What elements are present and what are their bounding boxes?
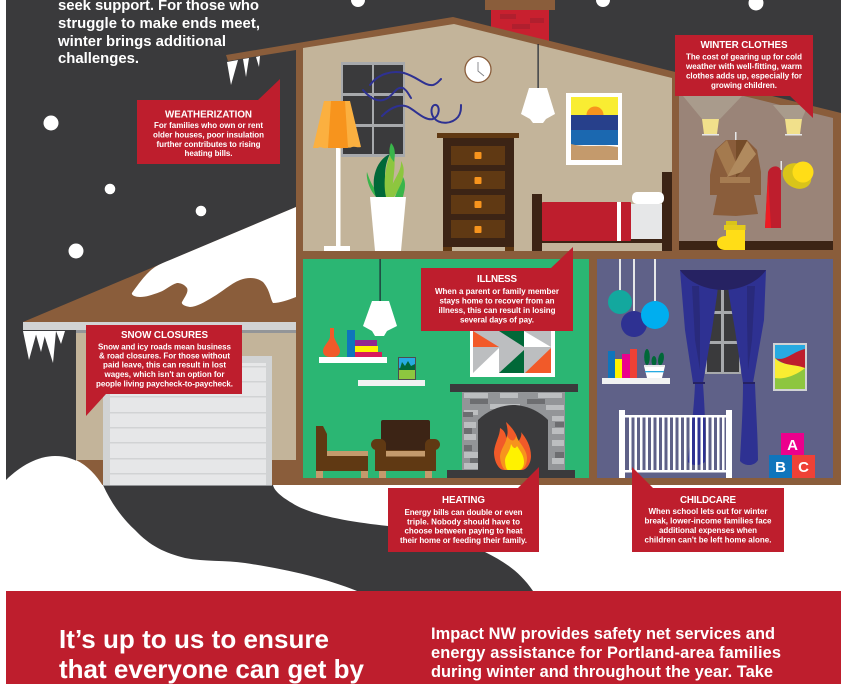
pendant lamp: [363, 259, 397, 336]
intro text: [57, 0, 260, 67]
callout: weatherization: older houses, poor insulation: [153, 130, 264, 140]
garage roof: [23, 207, 296, 322]
body text: [431, 625, 781, 681]
callout: illness: When a parent or family member: [435, 287, 559, 296]
callout: illness: stays home to recover from an: [440, 296, 555, 306]
side chair: [316, 426, 368, 478]
callout: snow closures: wages, which isn't an option for: [104, 370, 224, 379]
pendant lamp: [521, 44, 555, 123]
callout: snow closures: [86, 325, 242, 416]
callout: illness: illness, this can result in losing: [438, 306, 556, 315]
armchair: [371, 420, 440, 478]
callout: weatherization: heating bills.: [184, 149, 232, 158]
callout: snow closures: paid leave, this can result in lost: [103, 360, 226, 370]
room: living room: [303, 259, 589, 478]
geometric art: [470, 331, 555, 377]
colourful picture: [773, 343, 807, 391]
soffit: [23, 322, 296, 330]
heading: [59, 624, 365, 684]
callout: illness: [421, 247, 573, 331]
room: nursery: [597, 259, 833, 478]
callout: heating: HEATING: [442, 495, 485, 506]
callout: winter clothes: clothes adds up, especially for: [686, 72, 802, 80]
icicles: [23, 331, 65, 363]
shelf with books and plant: [602, 349, 670, 384]
callout: illness: several days of pay.: [460, 316, 534, 324]
callout: snow closures: & road closures. For those without: [99, 352, 230, 360]
callout: winter clothes: WINTER CLOTHES: [700, 40, 788, 51]
room: closet: [679, 80, 833, 250]
icon: rain boot: [717, 221, 746, 250]
garage door: [103, 356, 272, 486]
floor lamp: [313, 101, 361, 251]
intro text: struggle to make ends meet,: [58, 16, 260, 32]
snowy ground and driveway: [6, 456, 841, 591]
roof snow: [132, 207, 296, 307]
icon: draft wind lines: [363, 72, 461, 123]
house shell: [226, 17, 841, 485]
bed: [532, 172, 672, 251]
heading: It’s up to us to ensure: [59, 624, 329, 654]
panel: call to action: [6, 591, 841, 684]
body text: during winter and throughout the year. Take: [431, 663, 773, 681]
icon: red scarf: [765, 161, 782, 228]
callout: heating: [388, 467, 539, 552]
curtained window: [680, 270, 766, 465]
callout: heating: Energy bills can double or even: [404, 508, 523, 517]
callout: childcare: CHILDCARE: [680, 495, 736, 506]
roof icicles: [227, 56, 260, 85]
callout: heating: their home or feeding their family.: [400, 536, 527, 545]
body text: energy assistance for Portland-area families: [431, 644, 781, 662]
callout: weatherization: WEATHERIZATION: [165, 110, 252, 120]
room: bedroom: [303, 24, 672, 251]
heading: that everyone can get by: [59, 654, 365, 684]
alphabet blocks: B: [775, 459, 786, 476]
intro text: challenges.: [58, 51, 139, 67]
intro text: winter brings additional: [57, 34, 226, 50]
shelf with small picture: [358, 357, 425, 386]
callout: heating: choose between paying to heat: [404, 526, 523, 536]
icon: fire: [494, 422, 531, 470]
callout: childcare: When school lets out for winter: [648, 507, 768, 516]
callout: winter clothes: weather with well-fitting, warm: [685, 62, 802, 71]
icon: wall clock: [465, 56, 491, 82]
chimney: [485, 0, 555, 46]
closet lights: [683, 96, 808, 136]
callout: childcare: [632, 467, 784, 552]
callout: weatherization: For families who own or rent: [154, 121, 263, 130]
callout: winter clothes: The cost of gearing up for cold: [686, 52, 802, 62]
callout: weatherization: further contributes to rising: [156, 140, 261, 149]
callout: heating: triple. Nobody should have to: [407, 518, 520, 526]
crib: [619, 410, 732, 478]
body text: Impact NW provides safety net services and: [431, 625, 775, 643]
alphabet blocks: C: [798, 459, 809, 476]
snowflakes: [44, 0, 764, 258]
alphabet blocks: A: [787, 437, 798, 454]
shelf with vase and books: [319, 328, 387, 363]
callout: childcare: break, lower-income families face: [644, 516, 772, 526]
sunset picture: [566, 93, 622, 165]
callout: weatherization: [137, 79, 280, 164]
callout: snow closures: SNOW CLOSURES: [121, 330, 208, 341]
window: [341, 62, 405, 157]
fireplace: [447, 384, 578, 478]
callout: childcare: additional expenses when: [659, 526, 757, 535]
callout: childcare: children can't be left home alone.: [644, 536, 772, 544]
callout: winter clothes: growing children.: [711, 81, 777, 90]
callout: snow closures: Snow and icy roads mean business: [98, 342, 232, 352]
garage: [23, 207, 296, 486]
alphabet blocks: [769, 433, 815, 478]
potted plant: [367, 143, 406, 251]
callout: winter clothes: [675, 35, 813, 118]
dresser: [437, 133, 519, 251]
garage wall: [76, 333, 296, 460]
callout: snow closures: people living paycheck-to-paycheck.: [96, 380, 233, 388]
icon: yellow hat: [778, 158, 816, 194]
callout: illness: ILLNESS: [477, 274, 517, 285]
hanging mobile: [608, 259, 669, 337]
icon: winter coat: [710, 132, 761, 216]
